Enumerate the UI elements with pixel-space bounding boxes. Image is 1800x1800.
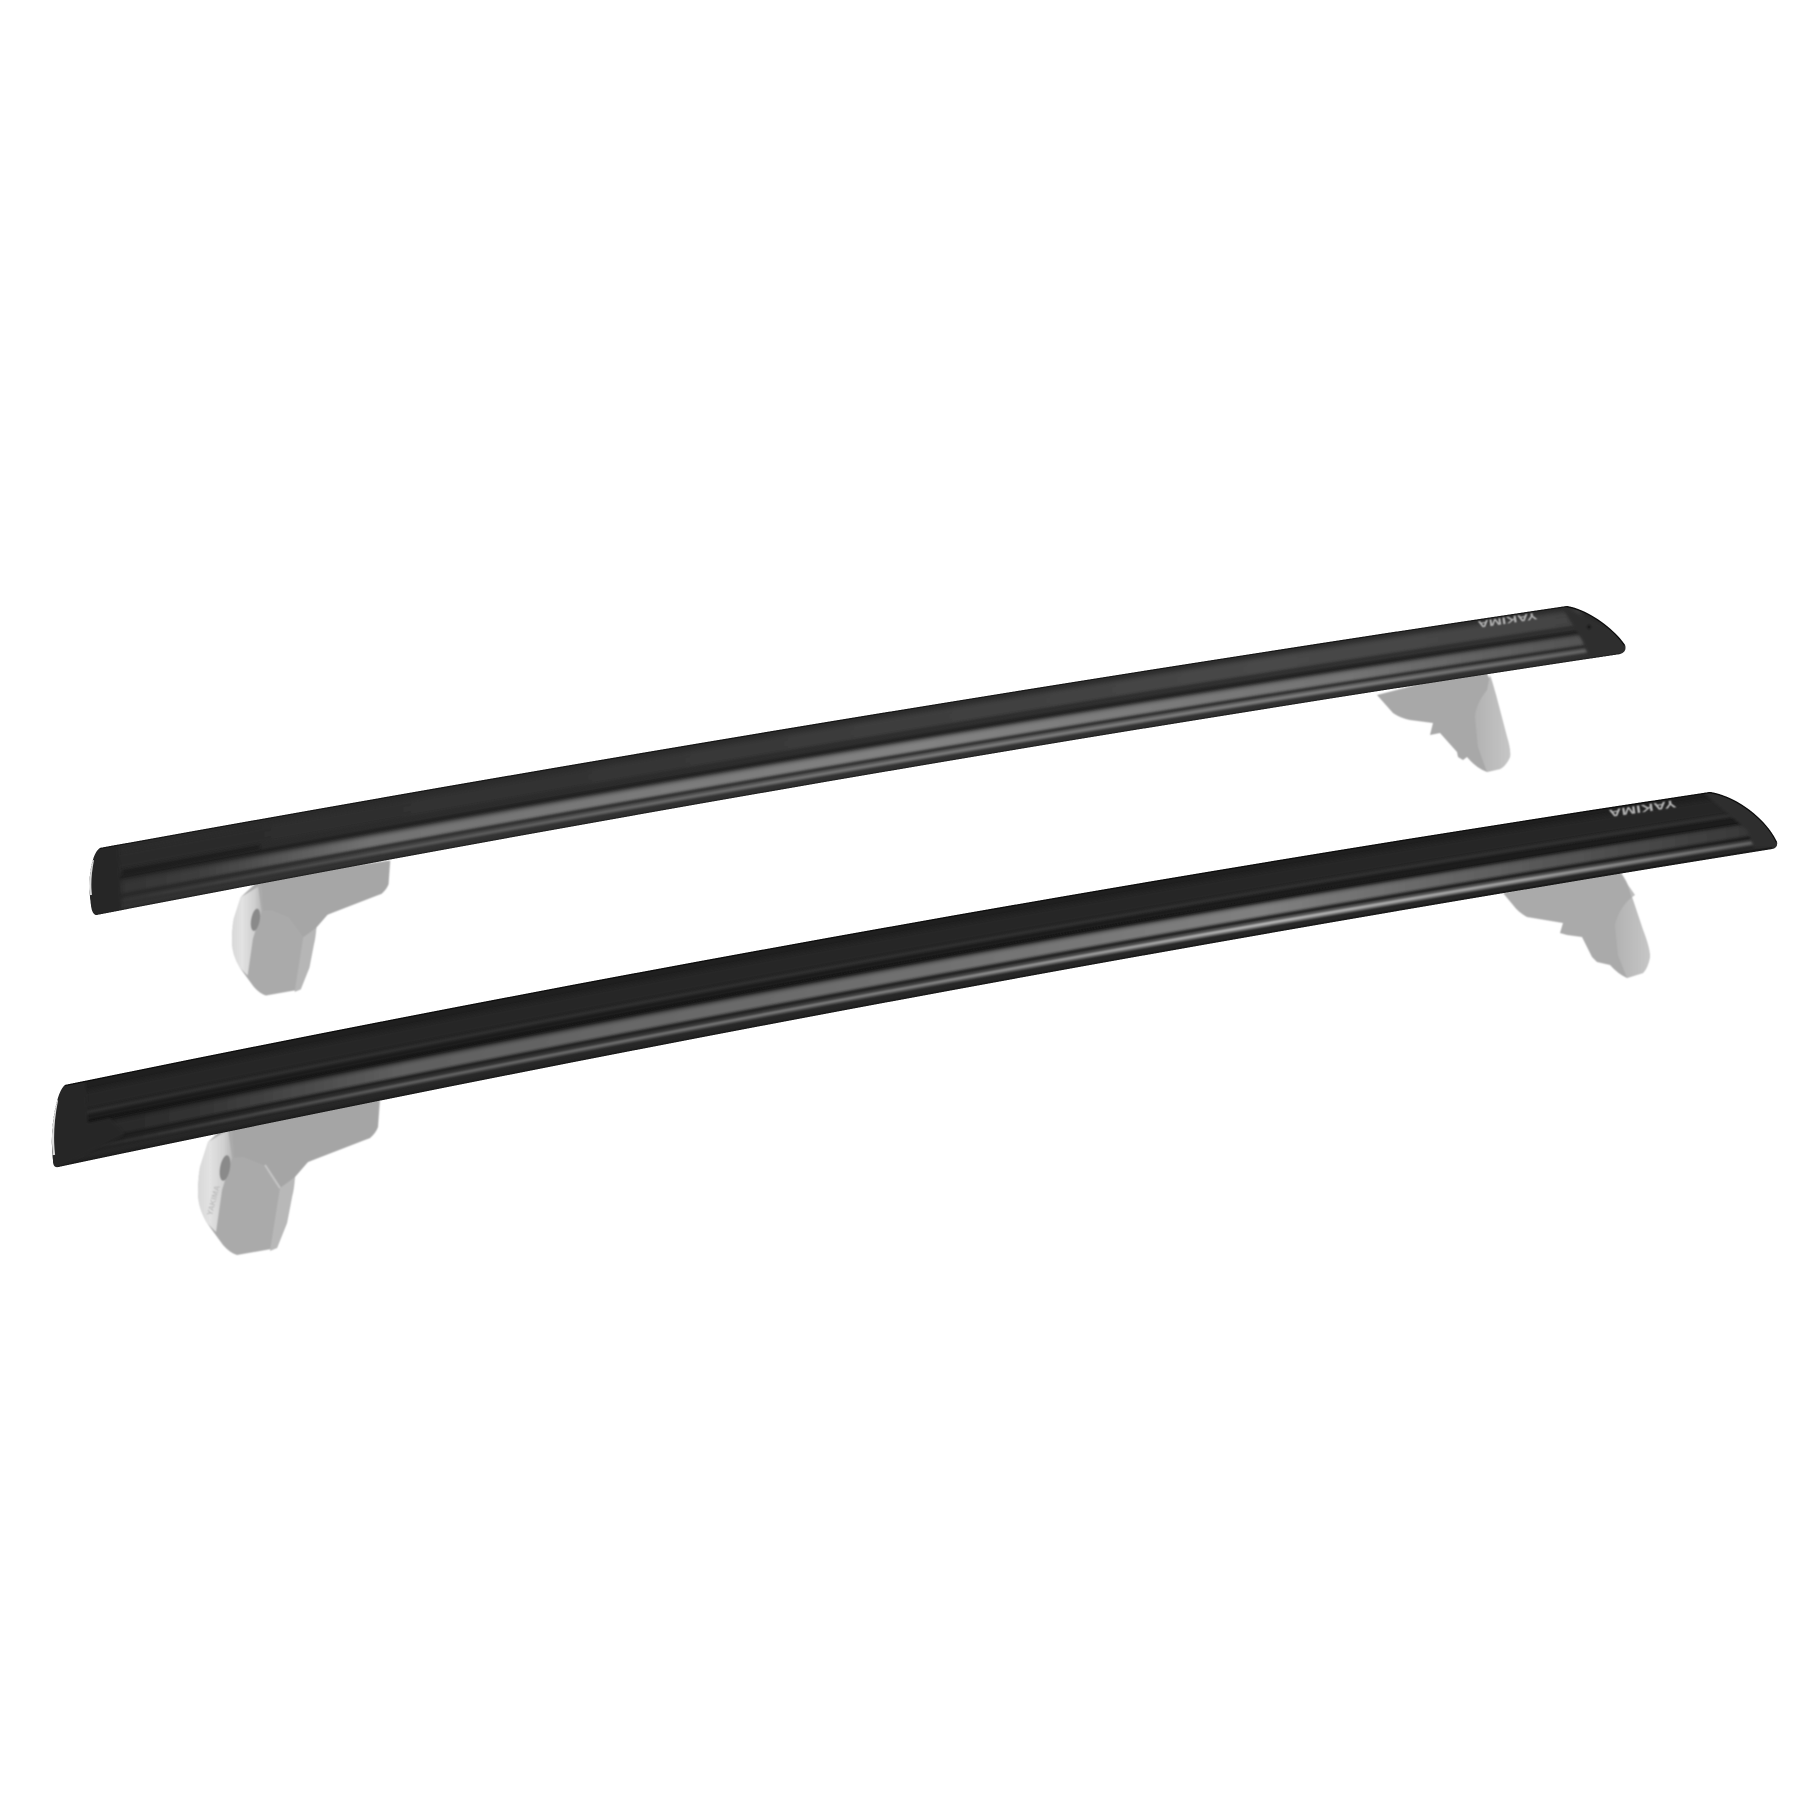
logo: front bar: YAKIMA <box>1607 797 1677 819</box>
foot: rear bar right mount <box>1377 668 1510 772</box>
foot: front bar left mount <box>198 1100 380 1255</box>
crossbar: rear <box>90 606 1626 915</box>
foot logo: YAKIMA <box>205 1184 222 1217</box>
edge highlight <box>53 1100 57 1155</box>
top edge line <box>65 792 1710 1085</box>
logo: rear bar: YAKIMA <box>1477 610 1538 629</box>
foot: front bar right mount <box>1503 868 1650 978</box>
top edge line <box>100 606 1567 848</box>
foot: rear bar left mount <box>232 861 390 996</box>
illustration: pair of roof rack crossbars <box>52 606 1778 1256</box>
bar end caps <box>88 604 1630 918</box>
edge highlight <box>90 860 93 895</box>
bar end caps <box>50 780 1790 1172</box>
crossbar: front <box>52 792 1778 1168</box>
